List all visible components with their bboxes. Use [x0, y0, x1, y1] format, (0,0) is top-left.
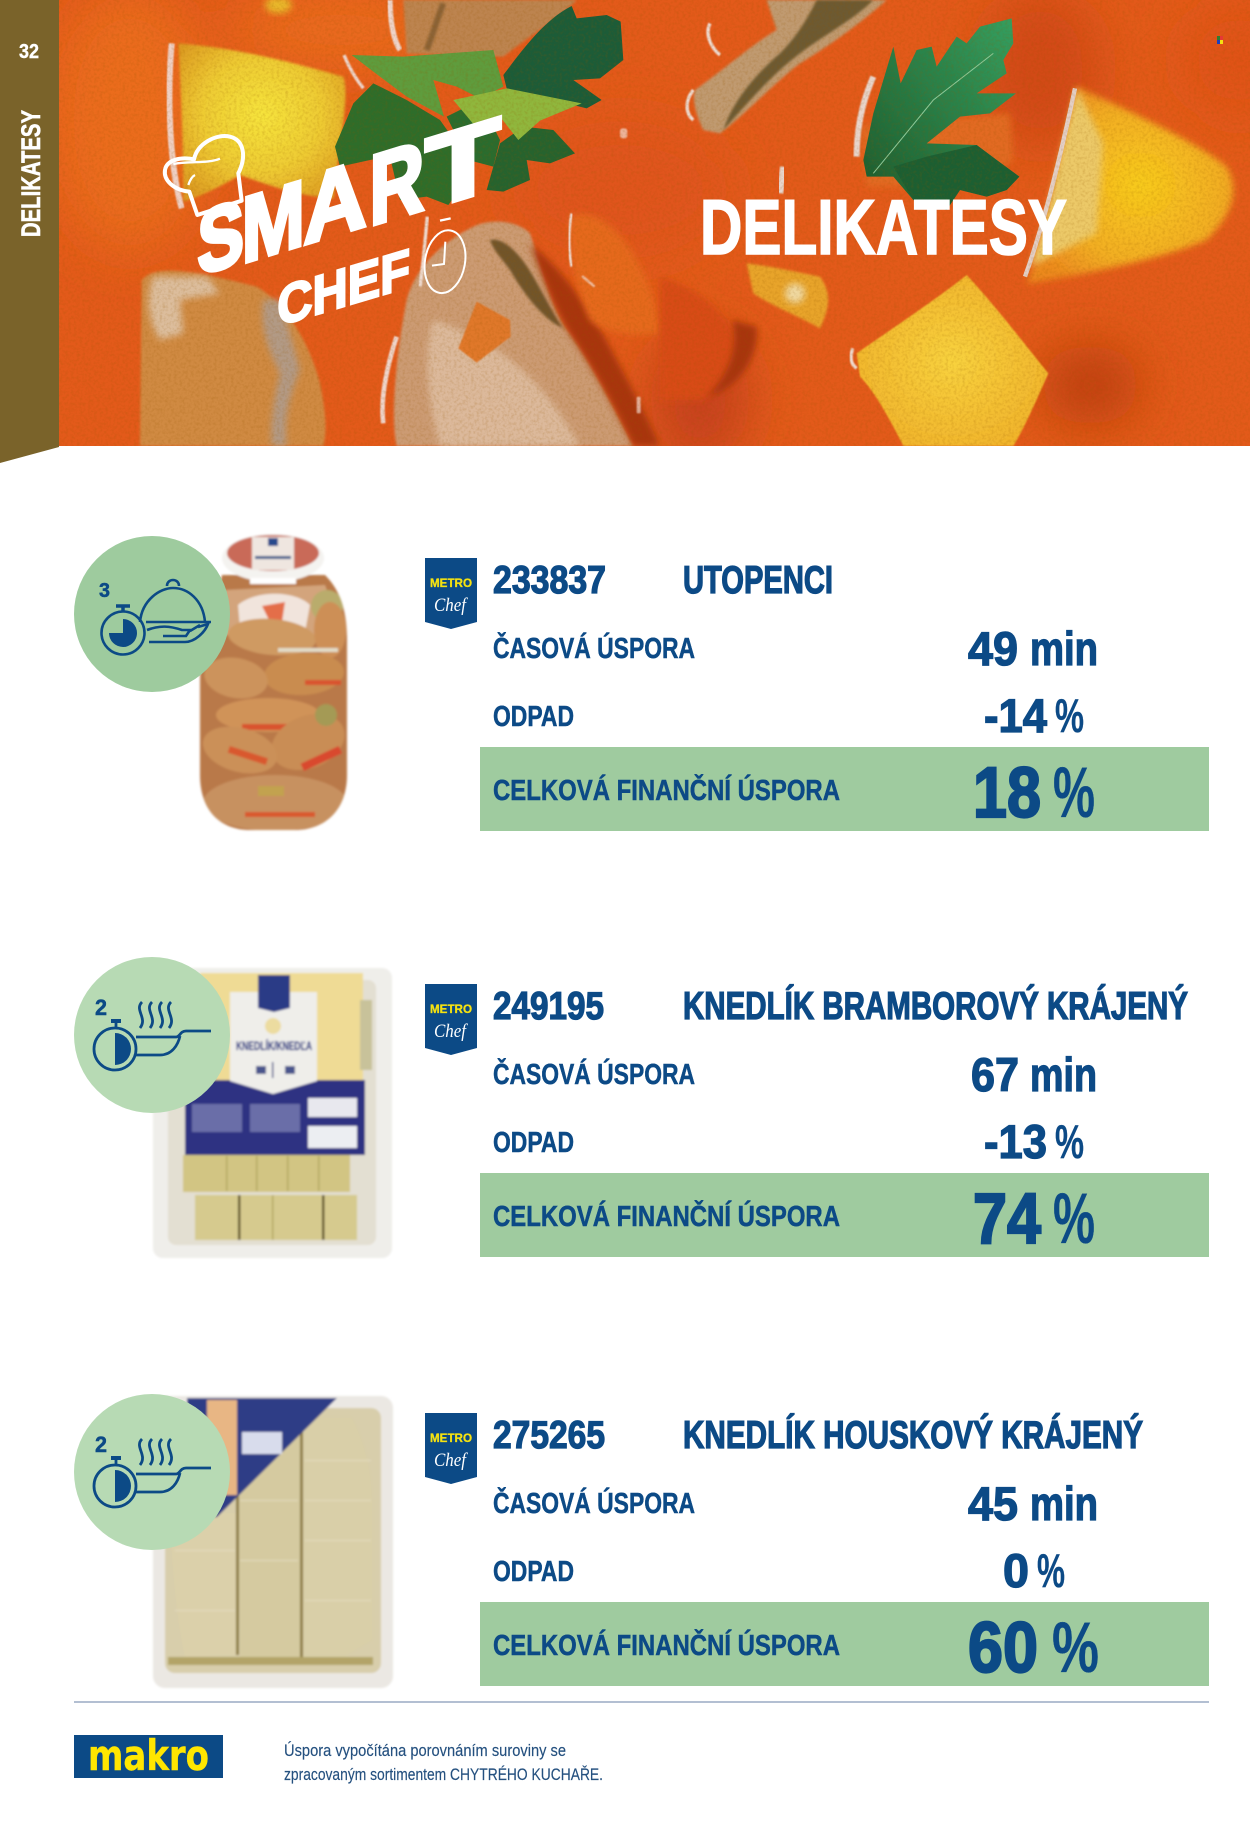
- value: time saving: min: [1030, 1048, 1097, 1101]
- wordmark: SMART: M: [242, 161, 305, 284]
- makro logo: makro: [88, 1731, 209, 1780]
- sauce folds: [530, 243, 660, 446]
- value: waste: %: [1055, 689, 1084, 742]
- icon: stopwatch and frying pan: 2: [95, 1432, 107, 1457]
- meat top right: [694, 0, 887, 133]
- label: waste: ODPAD: [493, 1556, 574, 1588]
- value: waste: %: [1055, 1115, 1084, 1168]
- savings highlight bar: [480, 1173, 1209, 1257]
- potato middle: [747, 263, 828, 328]
- METRO Chef badge: Chef: [434, 1021, 468, 1042]
- value: time saving: 49: [968, 622, 1018, 675]
- value: waste: -14: [984, 689, 1047, 742]
- parsley left: [335, 6, 623, 205]
- label: time saving: ČASOVÁ ÚSPORA: [493, 1486, 695, 1520]
- METRO Chef badge: METRO: [430, 576, 472, 590]
- icon: stopwatch and frying pan: 2: [95, 995, 107, 1020]
- product row: Knedlík bramborový: [74, 957, 1209, 1259]
- label: total saving: CELKOVÁ FINANČNÍ ÚSPORA: [493, 1199, 840, 1233]
- value: time saving: 45: [968, 1477, 1018, 1530]
- value: waste: 0: [1003, 1544, 1029, 1597]
- METRO Chef badge: METRO: [430, 1002, 472, 1016]
- shadow fold left: [660, 277, 737, 400]
- wordmark: SMART: T: [425, 96, 501, 232]
- METRO Chef badge: Chef: [434, 595, 468, 616]
- icon: chef hat: [165, 136, 243, 215]
- METRO Chef badge: [425, 1413, 477, 1484]
- product code: 275265: [493, 1414, 605, 1457]
- product row: Knedlík houskový: [74, 1394, 1209, 1688]
- value: total saving: [973, 1180, 1095, 1259]
- value: total saving: [968, 1609, 1099, 1688]
- value: time saving: [968, 1477, 1098, 1530]
- footnote: zpracovaným sortimentem CHYTRÉHO KUCHAŘE.: [284, 1765, 603, 1784]
- prep icon circle: [74, 536, 230, 692]
- icon: stopwatch and frying pan: [94, 995, 211, 1070]
- wordmark: SMART: [197, 96, 501, 295]
- savings highlight bar: [480, 747, 1209, 831]
- icon: stopwatch and serving cloche: 3: [99, 580, 110, 602]
- value: total saving: %: [1052, 1609, 1099, 1688]
- METRO Chef badge: Chef: [434, 1450, 468, 1471]
- product photo: bread dumpling tray: [153, 1396, 393, 1688]
- banner: [0, 0, 1250, 470]
- meat top: [403, 0, 577, 57]
- wordmark: SMART: S: [197, 180, 244, 295]
- label: total saving: CELKOVÁ FINANČNÍ ÚSPORA: [493, 773, 840, 807]
- value: waste: [984, 689, 1084, 742]
- sidebar tab: [0, 0, 59, 463]
- meat left: [140, 271, 326, 446]
- product name: UTOPENCI: [683, 559, 833, 602]
- icon: stopwatch and frying pan: [94, 1432, 211, 1507]
- footer: [74, 1701, 1209, 1784]
- value: time saving: 67: [971, 1048, 1019, 1101]
- potato bottom: [857, 275, 1048, 446]
- value: total saving: %: [1053, 754, 1095, 833]
- vertical section label: DELIKATESY: [16, 110, 46, 237]
- value: waste: %: [1037, 1544, 1065, 1597]
- shine marks: [581, 128, 641, 413]
- label: time saving: ČASOVÁ ÚSPORA: [493, 1057, 695, 1091]
- wordmark: SMART: A: [303, 137, 367, 265]
- wordmark: CHEF: CHEF: [277, 237, 410, 338]
- savings highlight bar: [480, 1602, 1209, 1686]
- page number: 32: [19, 41, 39, 63]
- label: waste: ODPAD: [493, 701, 574, 733]
- icon: stopwatch and serving cloche: [99, 580, 211, 654]
- potato top-left: [178, 43, 346, 202]
- value: time saving: [971, 1048, 1097, 1101]
- METRO Chef badge: METRO: [430, 1431, 472, 1445]
- product row: Utopenci: [74, 534, 1209, 833]
- value: time saving: min: [1030, 1477, 1098, 1530]
- value: waste: -13: [984, 1115, 1047, 1168]
- icon: clock: [420, 218, 470, 296]
- footnote: [284, 1741, 603, 1784]
- METRO Chef badge: [425, 984, 477, 1055]
- value: total saving: 74: [973, 1180, 1041, 1259]
- label: waste: ODPAD: [493, 1127, 574, 1159]
- product photo: jar: [195, 534, 353, 832]
- value: time saving: [968, 622, 1098, 675]
- wordmark: SMART: R: [369, 118, 424, 248]
- value: total saving: 60: [968, 1609, 1038, 1688]
- value: time saving: min: [1030, 622, 1098, 675]
- product code: 233837: [493, 559, 606, 602]
- banner heading: DELIKATESY: [700, 183, 1067, 271]
- label: time saving: ČASOVÁ ÚSPORA: [493, 631, 695, 665]
- value: total saving: 18: [973, 754, 1041, 833]
- logo: Smart Chef: [165, 96, 501, 338]
- value: total saving: [973, 754, 1095, 833]
- parsley right: [863, 18, 1019, 210]
- value: waste: [984, 1115, 1084, 1168]
- value: waste: [1003, 1544, 1065, 1597]
- product photo: potato dumpling tray: KNEDLÍK/KNEDĽA: [236, 1038, 312, 1053]
- label: total saving: CELKOVÁ FINANČNÍ ÚSPORA: [493, 1628, 840, 1662]
- prep icon circle: [74, 1394, 230, 1550]
- value: total saving: %: [1053, 1180, 1095, 1259]
- meat centre: [394, 222, 633, 446]
- potato right: [1027, 87, 1233, 283]
- banner photo: goulash: [50, 0, 1250, 470]
- small colour marks: [1217, 36, 1223, 44]
- footnote: Úspora vypočítána porovnáním suroviny se: [284, 1741, 566, 1760]
- product photo: potato dumpling tray: [153, 968, 392, 1258]
- product code: 249195: [493, 985, 604, 1028]
- METRO Chef badge: [425, 558, 477, 629]
- prep icon circle: [74, 957, 230, 1113]
- food texture: [59, 0, 1250, 446]
